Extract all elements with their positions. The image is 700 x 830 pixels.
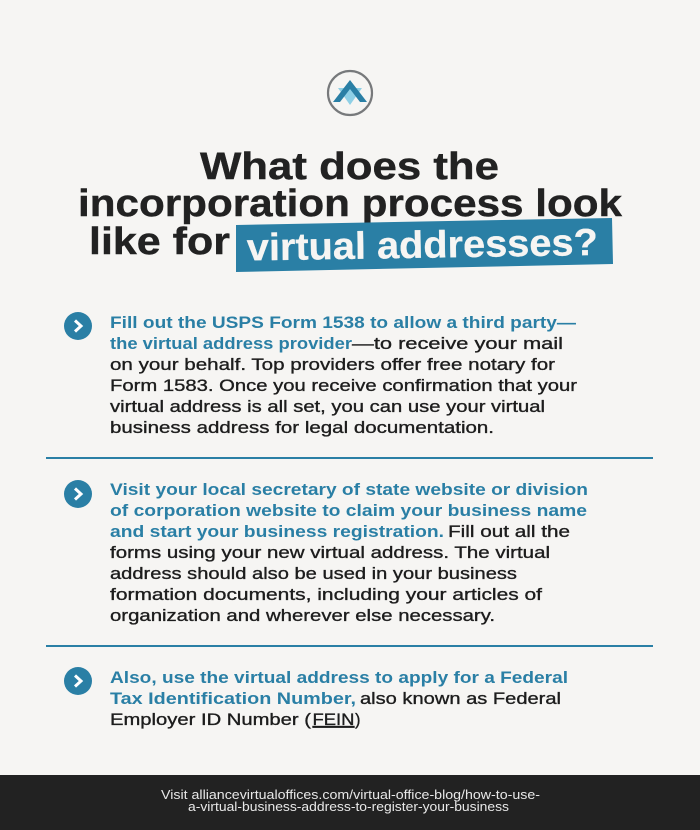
step 2 text: formation documents, including your articles of xyxy=(110,585,542,604)
icon: chevron bullet 1 xyxy=(64,312,92,340)
step 3 text: Also, use the virtual address to apply for a Federal xyxy=(110,668,568,687)
footer link text: Visit alliancevirtualoffices.com/virtual-office-blog/how-to-use- xyxy=(161,788,540,802)
title xyxy=(78,146,623,263)
step 3 text: Employer ID Number ( xyxy=(110,710,311,729)
step 1 text: the virtual address provider xyxy=(110,334,352,353)
step 1 text: business address for legal documentation. xyxy=(110,418,494,437)
step 1 text: —to receive your mail xyxy=(352,334,563,353)
footer link text: a-virtual-business-address-to-register-your-business xyxy=(188,800,509,814)
step 3 text: Tax Identification Number, xyxy=(110,689,356,708)
icon: chevron bullet 2 xyxy=(64,480,92,508)
step 1 text: Fill out the USPS Form 1538 to allow a third party— xyxy=(110,313,576,332)
step 1 text: virtual address is all set, you can use your virtual xyxy=(110,397,545,416)
step 3 text: ) xyxy=(355,710,360,729)
title: like for xyxy=(89,221,230,263)
step 2 text: organization and wherever else necessary. xyxy=(110,606,495,625)
step 3 text: also known as Federal xyxy=(360,689,561,708)
step 2 text: Visit your local secretary of state website or division xyxy=(110,480,588,499)
step 1 text xyxy=(110,313,577,437)
icon: chevron bullet 3 xyxy=(64,667,92,695)
step 2 xyxy=(64,480,588,625)
step 2 text xyxy=(110,480,588,625)
footer bar xyxy=(0,775,700,830)
step 3 xyxy=(64,667,568,729)
step 2 text: and start your business registration. xyxy=(110,522,444,541)
title highlight: virtual addresses: virtual addresses? xyxy=(246,222,598,269)
step 3 text: FEIN xyxy=(312,710,354,729)
step 2 text: forms using your new virtual address. The virtual xyxy=(110,543,550,562)
step 2 text: address should also be used in your business xyxy=(110,564,517,583)
logo xyxy=(328,71,372,115)
step 1 text: on your behalf. Top providers offer free notary for xyxy=(110,355,555,374)
step 1 xyxy=(64,312,577,437)
footer link text xyxy=(161,788,540,814)
title: incorporation process look xyxy=(78,183,623,225)
step 3 text xyxy=(110,668,568,729)
title: What does the xyxy=(200,146,499,188)
step 2 text: Fill out all the xyxy=(448,522,570,541)
step 1 text: Form 1583. Once you receive confirmation that your xyxy=(110,376,577,395)
step 2 text: of corporation website to claim your business name xyxy=(110,501,587,520)
